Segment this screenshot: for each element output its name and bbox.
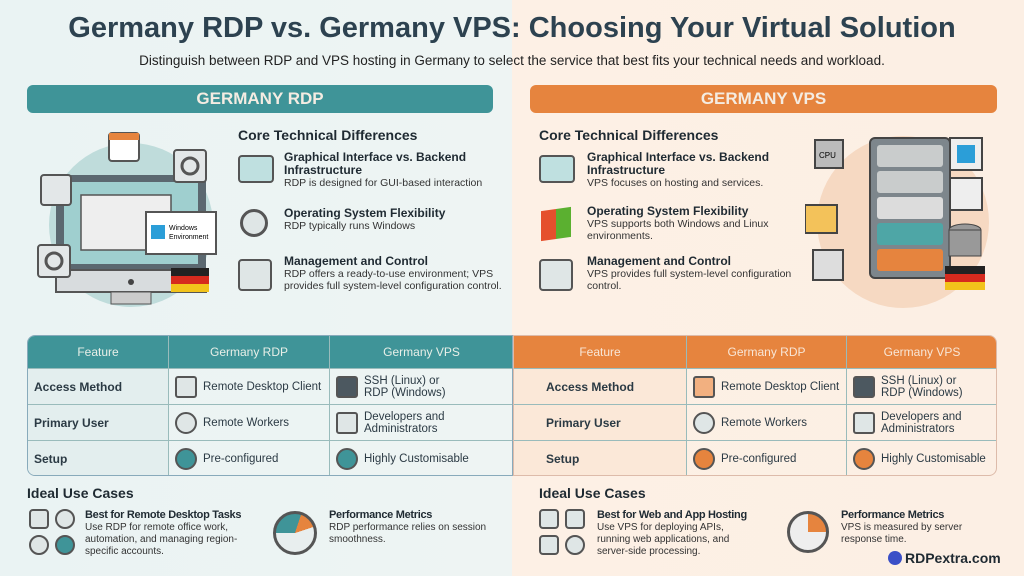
comparison table: left: Primary User [34, 416, 109, 430]
comparison table: right: Access Method [546, 380, 634, 394]
comparison table: left: Pre-configured [203, 452, 278, 464]
section: vps ideal use cases [539, 485, 962, 557]
comparison table: right: Primary User [546, 416, 621, 430]
comparison table: right: Setup [546, 452, 579, 466]
comparison table: left: Remote Workers [203, 416, 289, 428]
comparison table: right: SSH (Linux) or [881, 374, 956, 386]
illustration: rdp monitor: Environment [169, 234, 208, 241]
item: graphical interface: VPS focuses on hosting and services. [587, 177, 763, 189]
comparison table: right: Germany RDP [727, 345, 806, 359]
item: graphical interface: Graphical Interface vs. Backend Infrastructure [587, 150, 769, 177]
use case: remote desktop tasks: Best for Remote Desktop Tasks [85, 509, 241, 521]
comparison table: right: Remote Desktop Client [721, 380, 839, 392]
item: os flexibility [240, 206, 446, 237]
use case: remote desktop tasks: Use RDP for remote office work, automation, and managing region-specific accounts. [85, 522, 237, 557]
icon group: vps use cases [539, 509, 585, 555]
performance metrics vps: Performance Metrics [841, 509, 944, 521]
comparison table: right: Administrators [881, 422, 954, 434]
comparison table: right: Germany VPS [884, 345, 960, 359]
use case: web and app hosting [597, 509, 747, 557]
item: management: Management and Control [284, 254, 428, 268]
icon: speedometer [273, 511, 317, 555]
header: germany vps: GERMANY VPS [701, 89, 826, 108]
item: graphical interface [238, 150, 482, 189]
illustration: vps server rack: CPU [819, 151, 836, 160]
comparison table: left: Germany RDP [210, 345, 288, 359]
section: vps ideal use cases: Ideal Use Cases [539, 485, 646, 501]
icon group: rdp use cases [29, 509, 75, 555]
comparison table: left: Administrators [364, 422, 438, 434]
item: graphical interface: Graphical Interface vs. Backend Infrastructure [284, 150, 466, 177]
item: os flexibility: Operating System Flexibility [587, 204, 748, 218]
header: germany rdp [27, 85, 493, 113]
performance metrics vps [841, 509, 962, 545]
comparison table: left: Setup [34, 452, 67, 466]
comparison table: left: Access Method [34, 380, 122, 394]
comparison table: right [513, 335, 997, 476]
illustration: rdp monitor [37, 132, 217, 307]
comparison table: left: RDP (Windows) [364, 386, 446, 398]
item: os flexibility [541, 204, 769, 242]
performance metrics rdp: RDP performance relies on session smoothness. [329, 522, 486, 545]
panel: vps core differences: Core Technical Differences [539, 127, 718, 143]
illustration: vps server rack [805, 136, 989, 308]
item: management: Management and Control [587, 254, 731, 268]
item: os flexibility: RDP typically runs Windows [284, 220, 415, 232]
panel: vps core differences [539, 127, 791, 292]
panel: rdp core differences [238, 127, 502, 292]
comparison table: right: Developers and [881, 410, 962, 422]
comparison table: right: Highly Customisable [881, 452, 986, 464]
comparison table: right: Remote Workers [721, 416, 807, 428]
header: germany vps [530, 85, 997, 113]
item: management: VPS provides full system-level configuration control. [587, 268, 791, 292]
item: graphical interface [539, 150, 769, 189]
comparison table: right: Feature [579, 345, 621, 359]
section: rdp ideal use cases [27, 485, 486, 557]
comparison table: left: Highly Customisable [364, 452, 469, 464]
comparison table: left: Germany VPS [383, 345, 460, 359]
performance metrics rdp [329, 509, 486, 545]
comparison table: right: RDP (Windows) [881, 386, 963, 398]
use case: web and app hosting: Use VPS for deploying APIs, running web applications, and server-side processing. [597, 522, 729, 557]
header: germany rdp: GERMANY RDP [196, 89, 324, 108]
icon: stopwatch [787, 511, 829, 553]
item: management [238, 254, 502, 292]
item: management: RDP offers a ready-to-use environment; VPS provides full system-level configuration control. [284, 268, 502, 292]
subtitle: Distinguish between RDP and VPS hosting in Germany to select the service that best fits your technical needs and workload. [139, 53, 885, 68]
illustration: rdp monitor: Windows [169, 225, 198, 232]
item: os flexibility: VPS supports both Windows and Linux environments. [587, 218, 769, 242]
item: graphical interface: RDP is designed for GUI-based interaction [284, 177, 482, 189]
item: os flexibility: Operating System Flexibility [284, 206, 445, 220]
item: management [539, 254, 791, 292]
comparison table: left: Feature [77, 345, 119, 359]
performance metrics vps: VPS is measured by server response time. [841, 522, 962, 545]
performance metrics rdp: Performance Metrics [329, 509, 432, 521]
panel: rdp core differences: Core Technical Differences [238, 127, 417, 143]
comparison table: left: Developers and [364, 410, 445, 422]
use case: web and app hosting: Best for Web and App Hosting [597, 509, 747, 521]
comparison table: left: Remote Desktop Client [203, 380, 321, 392]
title: Germany RDP vs. Germany VPS: Choosing Your Virtual Solution [68, 12, 956, 44]
comparison table: left [27, 335, 513, 476]
logo: rdpextra: RDPextra.com [905, 550, 1001, 566]
comparison table: left: SSH (Linux) or [364, 374, 439, 386]
section: rdp ideal use cases: Ideal Use Cases [27, 485, 134, 501]
comparison table: right: Pre-configured [721, 452, 796, 464]
